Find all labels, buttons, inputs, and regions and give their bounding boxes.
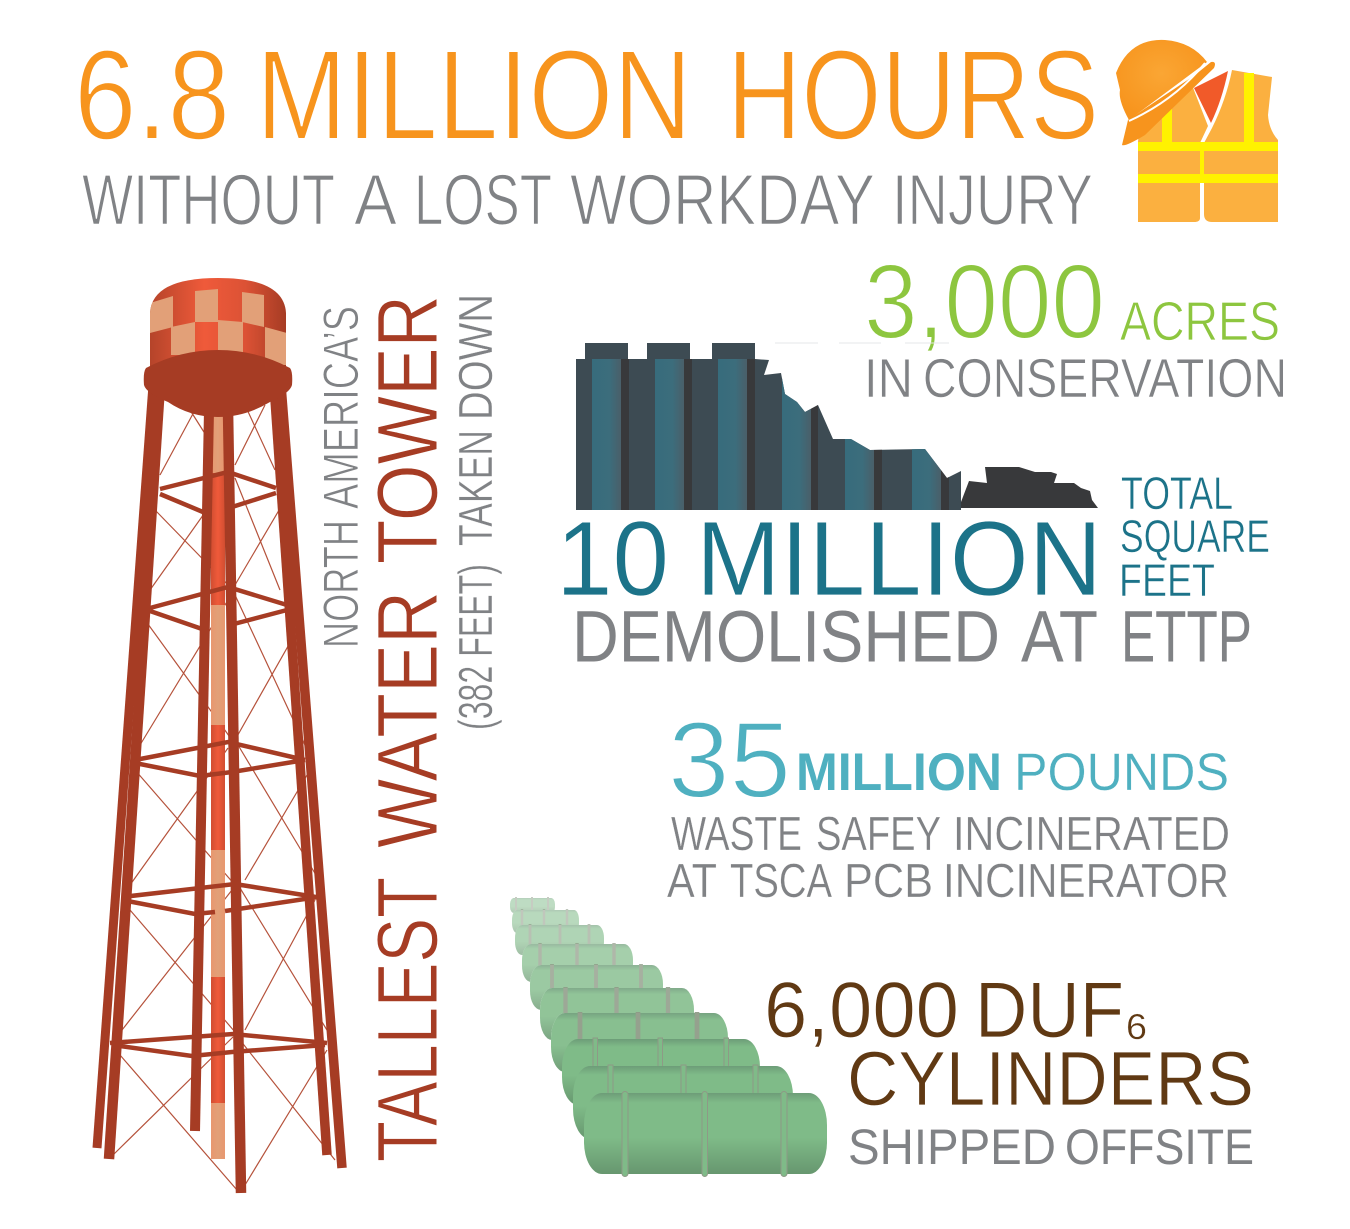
faint roofline remains [775, 342, 949, 344]
text: shipped offsite [848, 1119, 1254, 1175]
cylinder 2 [512, 909, 579, 933]
cylinder 4 [522, 943, 633, 982]
illustration: rows of cylinders [510, 897, 827, 1176]
tank [144, 278, 292, 417]
text: at tsca pcb incinerator: AT [667, 855, 717, 908]
rotated label: north america's [313, 306, 369, 648]
cylinder 7 [551, 1012, 728, 1072]
stat: 35: 35 [668, 699, 791, 820]
text: shipped offsite: OFFSITE [1065, 1119, 1254, 1175]
title: 6.8 million hours: MILLION [256, 24, 692, 167]
text: demolished at ettp: ETTP [1121, 596, 1252, 678]
icon: hard hat and safety vest [1116, 40, 1278, 222]
text: waste safey incinerated: SAFEY [816, 808, 941, 861]
text: at tsca pcb incinerator: INCINERATOR [943, 855, 1229, 908]
cross bracing [113, 405, 335, 1190]
central pipe [211, 415, 225, 1159]
subtitle: without a lost workday injury: LOST [414, 160, 552, 240]
text: at tsca pcb incinerator: PCB [844, 855, 933, 908]
water tower illustration [97, 278, 342, 1193]
subtitle: without a lost workday injury: A [354, 160, 397, 240]
stat: 10 million: MILLION [696, 500, 1102, 618]
rotated label: north america's: NORTH [313, 520, 369, 648]
stat: million, bold: MILLION [796, 743, 1002, 802]
stat: 3,000 acres number: 3,000 [864, 243, 1105, 361]
text: waste safey incinerated: WASTE [671, 808, 802, 861]
rotated label: 382 feet taken down: DOWN [450, 294, 503, 420]
stat: 6,000 duf: DUF [975, 965, 1124, 1054]
rotated heading: tallest water tower: TALLEST [360, 877, 456, 1162]
cylinder 9 [573, 1065, 793, 1139]
building remains [576, 343, 961, 510]
cylinder 1 [510, 897, 555, 913]
vest collar [1194, 71, 1228, 123]
rotated label: 382 feet taken down [450, 294, 503, 730]
cylinder 10, front [584, 1092, 827, 1176]
label: feet: FEET [1119, 554, 1215, 606]
rubble pile [961, 467, 1098, 508]
stat: 10 million: 10 [556, 500, 669, 618]
stat: cylinders: CYLINDERS [847, 1036, 1254, 1122]
tank checker pattern [150, 289, 287, 365]
cylinder 8 [562, 1038, 760, 1105]
vest body [1138, 70, 1278, 222]
subtitle: without a lost workday injury: WORKDAY [570, 160, 875, 240]
text: waste safey incinerated: INCINERATED [953, 808, 1230, 861]
rotated label: north america's: AMERICA’S [313, 306, 369, 509]
text: waste safey incinerated [671, 808, 1230, 861]
reflective strips [1138, 73, 1278, 183]
stat: acres label: ACRES [1120, 290, 1280, 352]
text: demolished at ettp: AT [1021, 596, 1098, 678]
stat: 6,000 duf: 6,000 [764, 965, 959, 1054]
subtitle: without a lost workday injury [82, 160, 1093, 240]
label: total: TOTAL [1121, 467, 1233, 519]
stat: pounds: POUNDS [1014, 743, 1229, 802]
title: 6.8 million hours: HOURS [727, 24, 1099, 167]
subtitle: without a lost workday injury: INJURY [892, 160, 1093, 240]
subtitle: without a lost workday injury: WITHOUT [82, 160, 335, 240]
rotated heading: tallest water tower: WATER [360, 591, 456, 848]
rotated heading: tallest water tower [360, 295, 456, 1162]
text: at tsca pcb incinerator [667, 855, 1229, 908]
cylinder 5 [530, 964, 663, 1010]
stat: 6,000 duf [764, 965, 1124, 1054]
rotated heading: tallest water tower: TOWER [360, 295, 456, 564]
illustration: demolished building [576, 343, 1098, 510]
rotated label: 382 feet taken down: (382 FEET) [450, 564, 503, 730]
hard hat [1116, 40, 1215, 145]
title: 6.8 million hours: 6.8 [74, 24, 230, 167]
tower legs [97, 385, 342, 1193]
title: 6.8 million hours [74, 24, 1099, 167]
rotated label: 382 feet taken down: TAKEN [450, 430, 503, 546]
tank base [144, 350, 292, 417]
cylinder 6 [540, 987, 694, 1040]
text: shipped offsite: SHIPPED [848, 1119, 1056, 1175]
text: in conservation: IN [864, 347, 913, 409]
label: square: SQUARE [1120, 510, 1270, 562]
text: demolished at ettp: DEMOLISHED [572, 596, 1000, 678]
stat: subscript 6: 6 [1126, 1006, 1147, 1047]
text: in conservation: CONSERVATION [923, 347, 1287, 409]
cylinder 3 [515, 924, 604, 955]
text: at tsca pcb incinerator: TSCA [730, 855, 832, 908]
horizontal braces [110, 472, 327, 1056]
